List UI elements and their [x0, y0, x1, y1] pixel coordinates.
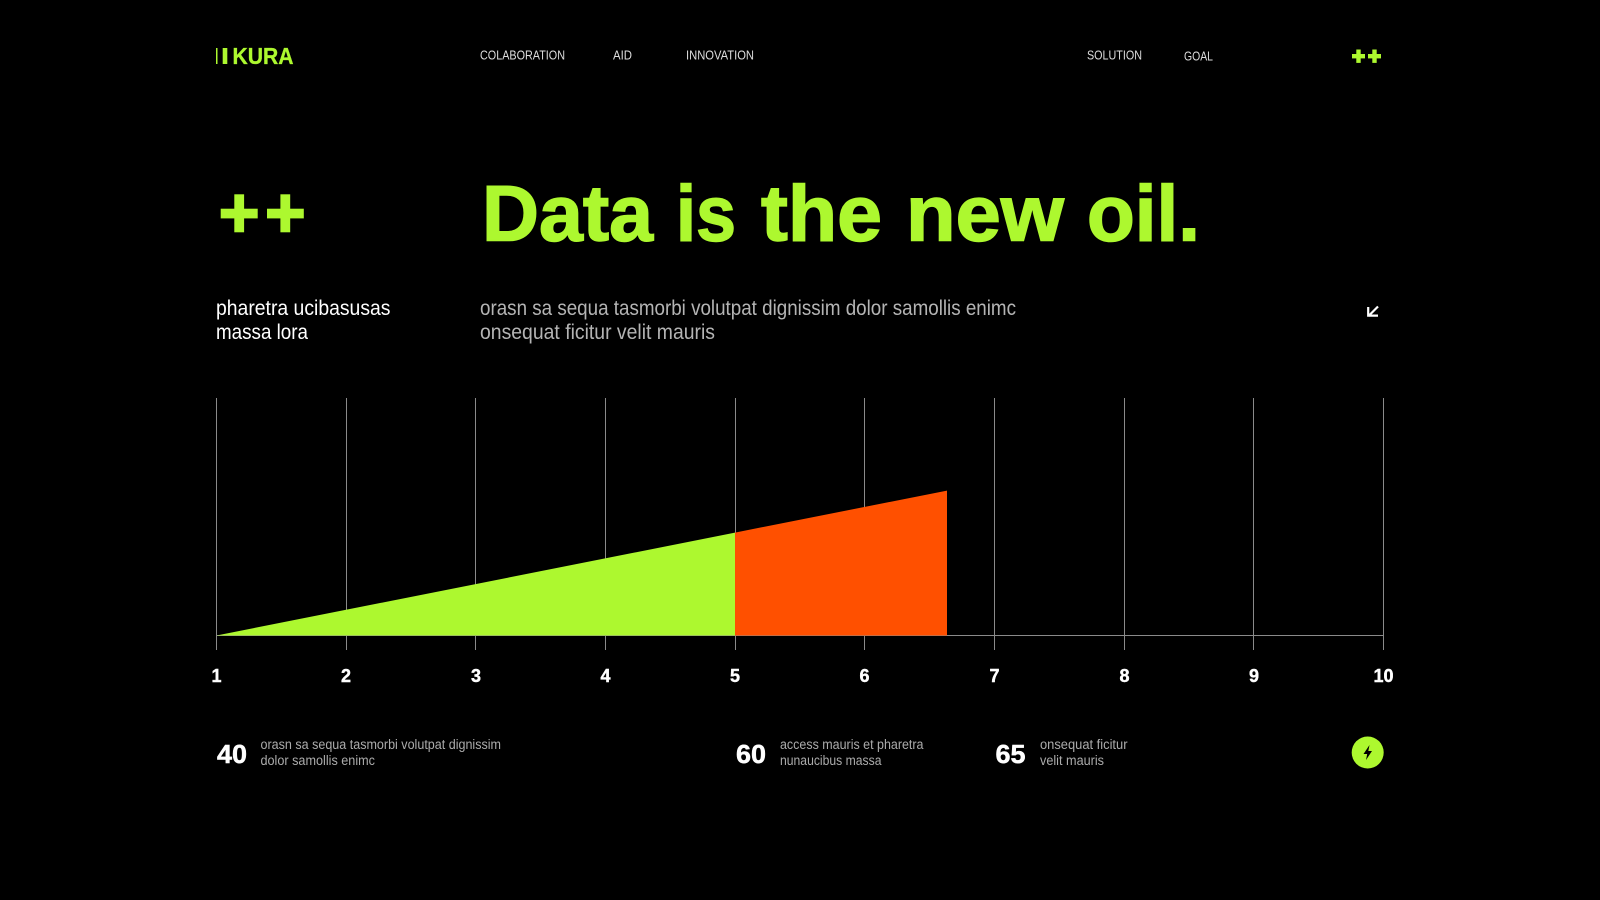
description text	[480, 297, 1016, 344]
icon: large double plus	[221, 194, 304, 232]
stat: 65	[996, 737, 1128, 769]
stat: 65: 65	[996, 739, 1026, 769]
icon: small double plus	[1352, 50, 1381, 63]
title: the	[761, 168, 882, 258]
header bar	[216, 43, 1381, 69]
title	[482, 168, 1200, 258]
title: Data	[482, 168, 654, 258]
area chart	[211, 398, 1394, 686]
logo: KURA: KURA	[232, 43, 294, 69]
stat: 65: onsequat ficitur	[1040, 737, 1128, 752]
axis labels: 2	[341, 666, 351, 686]
navigation links: GOAL	[1184, 50, 1213, 64]
icon: down-left arrow	[1368, 306, 1378, 316]
vertical grid lines	[216, 398, 1384, 650]
icon: lightning badge	[1352, 736, 1384, 768]
stat: 60: 60	[736, 739, 766, 769]
subtitle left	[216, 297, 390, 344]
navigation links: COLABORATION	[480, 48, 565, 62]
title: is	[676, 168, 736, 258]
stat: 65: velit mauris	[1040, 753, 1104, 768]
navigation links: AID	[613, 48, 632, 62]
stat: 40: orasn sa sequa tasmorbi volutpat dignissim	[260, 737, 501, 752]
axis labels: 1	[211, 666, 222, 686]
navigation links: INNOVATION	[686, 48, 754, 62]
stat: 60	[736, 737, 924, 769]
subtitle left: massa lora	[216, 321, 308, 344]
stat: 60: access mauris et pharetra	[780, 737, 924, 752]
title: new	[906, 168, 1065, 258]
green area	[216, 533, 735, 636]
axis labels: 6	[859, 666, 870, 686]
axis labels: 8	[1119, 666, 1130, 686]
description text: orasn sa sequa tasmorbi volutpat dignissim dolor samollis enimc	[480, 297, 1016, 320]
axis labels: 9	[1249, 666, 1259, 686]
axis labels	[211, 666, 1394, 686]
title: oil.	[1087, 168, 1200, 258]
navigation links	[480, 48, 1213, 64]
stat: 60: nunaucibus massa	[780, 753, 882, 768]
description text: onsequat ficitur velit mauris	[480, 321, 715, 344]
orange area	[735, 491, 947, 636]
axis labels: 3	[471, 666, 481, 686]
axis labels: 4	[600, 666, 611, 686]
navigation links: SOLUTION	[1087, 48, 1142, 62]
stat: 40: 40	[217, 739, 247, 769]
axis labels: 5	[730, 666, 740, 686]
stat: 40	[217, 737, 501, 769]
axis labels: 7	[989, 666, 1000, 686]
axis labels: 10	[1373, 666, 1394, 686]
subtitle left: pharetra ucibasusas	[216, 297, 390, 320]
stat: 40: dolor samollis enimc	[260, 753, 375, 768]
